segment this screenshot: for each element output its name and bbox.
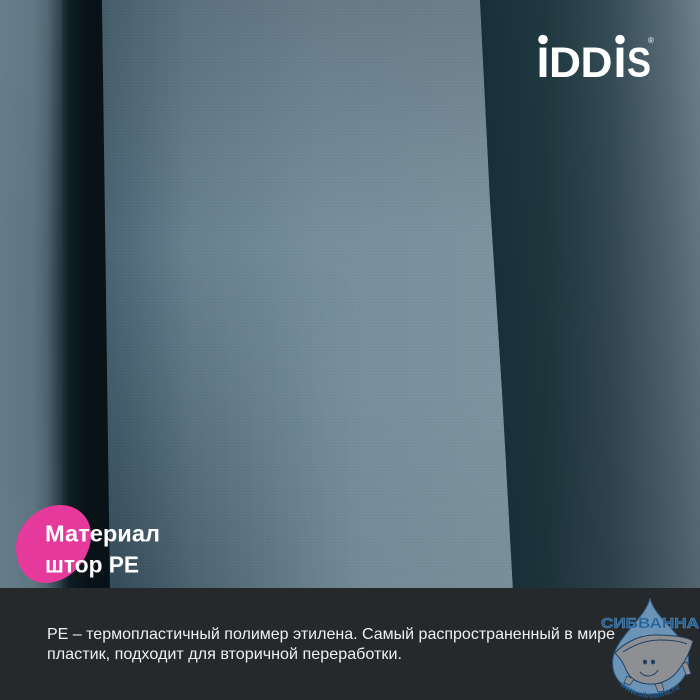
logo: iDDIS: S xyxy=(627,38,651,86)
logo: iDDIS: I xyxy=(536,39,550,87)
body text: PE – термопластичный полимер этилена. Самый распространенный в мире xyxy=(47,626,615,643)
body text: пластик, подходит для вторичной переработки. xyxy=(47,646,402,663)
watermark url: www.sibvanna.ru xyxy=(620,682,680,698)
bath legs xyxy=(624,662,691,692)
logo: iDDIS xyxy=(536,35,654,87)
logo: iDDIS: I xyxy=(614,39,626,87)
heading: Материал штор PE xyxy=(45,520,160,578)
watermark drop xyxy=(613,598,689,694)
watermark name: СИБВАННА xyxy=(601,615,699,632)
bottom dark band xyxy=(0,588,700,700)
right curtain fold xyxy=(480,0,700,590)
pink accent blob xyxy=(16,505,91,583)
central curtain panel xyxy=(102,0,513,590)
watermark bath xyxy=(615,635,693,692)
watermark: Сибванна xyxy=(601,598,699,698)
logo: iDDIS: ® xyxy=(648,36,654,45)
left curtain fold xyxy=(0,0,112,590)
logo: iDDIS: D xyxy=(580,39,612,87)
heading: Материал штор PE: Материал xyxy=(45,520,160,546)
heading: Материал штор PE: штор PE xyxy=(45,552,139,578)
body text xyxy=(47,626,615,663)
logo: iDDIS: D xyxy=(549,39,581,87)
